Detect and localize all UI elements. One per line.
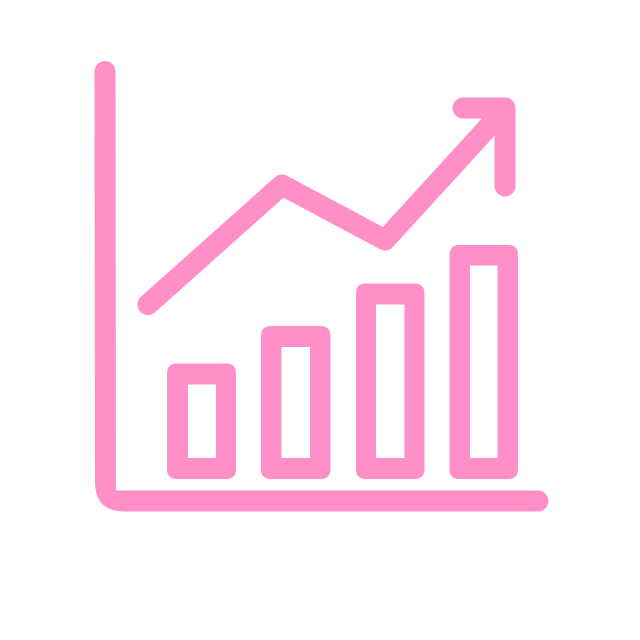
arrow head bbox=[463, 108, 505, 186]
bar 4 bbox=[450, 245, 518, 479]
bar 1 bbox=[167, 364, 236, 479]
chart axes bbox=[94, 61, 548, 512]
bar 3 bbox=[356, 284, 424, 479]
bar 2 bbox=[261, 326, 330, 479]
trend line bbox=[148, 111, 503, 304]
